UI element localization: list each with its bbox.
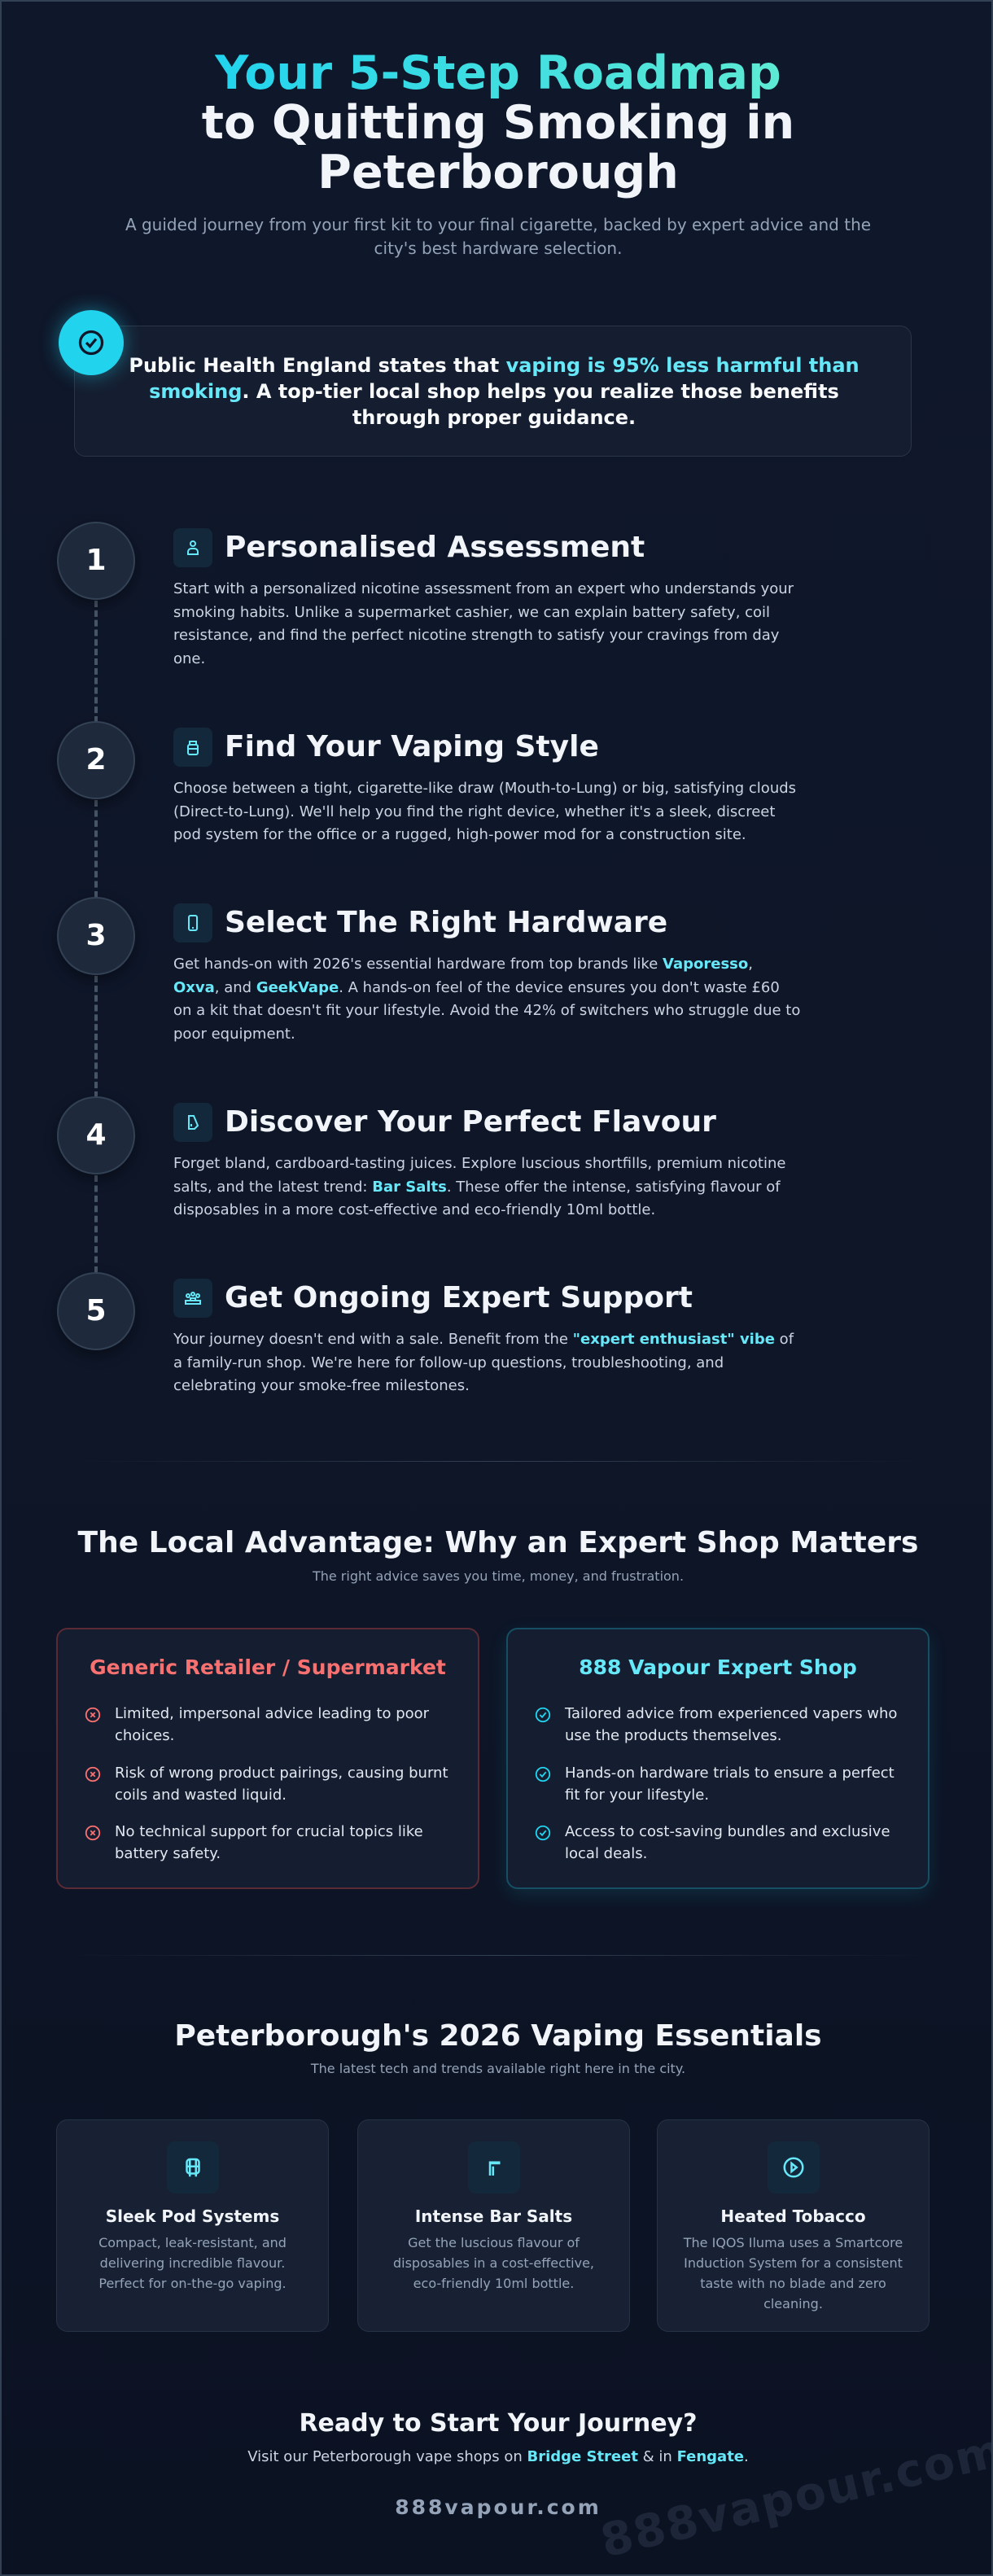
list item: Access to cost-saving bundles and exclusive local deals. [565,1823,890,1862]
step number 2: 2 [85,743,107,776]
step number 2 [57,721,135,799]
step text: Choose between a tight, cigarette-like draw (Mouth-to-Lung) or big, satisfying clouds (Direct-to-Lung). We'll help you find the right device, whether it's a sleek, discreet pod system for the office or a rugged, high-power mod for a construction site. [173,780,796,843]
icon: device [173,728,212,767]
title: Peterborough [317,146,679,199]
callout: public health england [74,326,912,457]
panel heading: 888 Vapour Expert Shop [579,1655,857,1679]
list item: No technical support for crucial topics like battery safety. [115,1823,423,1862]
title: Your 5-Step Roadmap [215,46,781,100]
icon: people [173,1279,212,1318]
subheading: The right advice saves you time, money, and frustration. [313,1568,684,1584]
step text: Start with a personalized nicotine assessment from an expert who understands your smoking habits. Unlike a supermarket cashier, we can explain battery safety, coil resistance, and find the perfect nicotine strength to satisfy your cravings from day one. [173,580,794,667]
subtitle: A guided journey from your first kit to your final cigarette, backed by expert advice and the city's best hardware selection. [125,215,871,258]
panel heading: Generic Retailer / Supermarket [90,1655,446,1679]
step number 5: 5 [85,1294,107,1327]
card text: The IQOS Iluma uses a Smartcore Induction System for a consistent taste with no blade and zero cleaning. [684,2235,903,2311]
step title: Personalised Assessment [225,531,645,564]
website: 888vapour.com [395,2495,601,2519]
step title: Select The Right Hardware [225,906,667,939]
title: to Quitting Smoking in [202,96,794,150]
step 4 [57,1096,785,1218]
icon: flavour [173,1103,212,1142]
cta text: Visit our Peterborough vape shops on Bridge Street & in Fengate. [247,2448,749,2465]
step 2 [57,721,796,843]
title [202,46,794,199]
card title: Intense Bar Salts [415,2206,572,2226]
step text: Your journey doesn't end with a sale. Benefit from the "expert enthusiast" vibe of a family-run shop. We're here for follow-up questions, troubleshooting, and celebrating your smoke-free milestones. [173,1331,794,1394]
card title: Sleek Pod Systems [106,2206,279,2226]
list item: Hands-on hardware trials to ensure a perfect fit for your lifestyle. [565,1765,895,1804]
icon: bottle [468,2141,520,2193]
list item: Tailored advice from experienced vapers who use the products themselves. [565,1705,897,1744]
step number 5 [57,1272,135,1350]
step number 4 [57,1096,135,1174]
icon: play circle [768,2141,820,2193]
card: bar salts [357,2119,630,2332]
step number 3: 3 [85,919,107,952]
cta heading: Ready to Start Your Journey? [299,2409,698,2438]
icon: phone [173,903,212,942]
list item: Limited, impersonal advice leading to poor choices. [115,1705,429,1744]
list item: Risk of wrong product pairings, causing burnt coils and wasted liquid. [115,1765,448,1804]
step number 3 [57,897,135,975]
step number 4: 4 [85,1118,107,1152]
step number 1: 1 [85,544,107,577]
step 1 [57,522,794,667]
step title: Get Ongoing Expert Support [225,1281,693,1314]
step text: Forget bland, cardboard-tasting juices. Explore luscious shortfills, premium nicotine salts, and the latest trend: Bar Salts. These offer the intense, satisfying flavour of disposables in a more cost-effective and eco-friendly 10ml bottle. [173,1155,785,1218]
step 5 [57,1272,794,1394]
card: pod systems [56,2119,329,2332]
icon: person [173,528,212,567]
subheading: The latest tech and trends available right here in the city. [311,2061,685,2076]
step number 1 [57,522,135,600]
heading: essentials: Peterborough's 2026 Vaping Essentials [174,2019,822,2053]
step title: Find Your Vaping Style [225,730,599,763]
step text: Get hands-on with 2026's essential hardware from top brands like Vaporesso, Oxva, and GeekVape. A hands-on feel of the device ensures you don't waste £60 on a kit that doesn't fit your lifestyle. Avoid the 42% of switchers who struggle due to poor equipment. [173,956,800,1042]
card title: Heated Tobacco [720,2206,866,2226]
step 3 [57,897,800,1042]
heading: local advantage: The Local Advantage: Why an Expert Shop Matters [78,1526,918,1559]
icon: check badge [59,310,124,375]
panel: generic retailer [56,1628,479,1889]
icon: pod [167,2141,219,2193]
callout: public health england: Public Health England states that vaping is 95% less harmful than smoking. A top-tier local shop helps you realize those benefits through proper guidance. [129,354,860,429]
card: heated tobacco [657,2119,930,2332]
timeline dashes [94,601,98,723]
card text: Get the luscious flavour of disposables in a cost-effective, eco-friendly 10ml bottle. [393,2235,594,2291]
card text: Compact, leak-resistant, and delivering incredible flavour. Perfect for on-the-go vaping. [98,2235,287,2291]
step title: Discover Your Perfect Flavour [225,1105,716,1139]
panel: 888 vapour [506,1628,930,1889]
